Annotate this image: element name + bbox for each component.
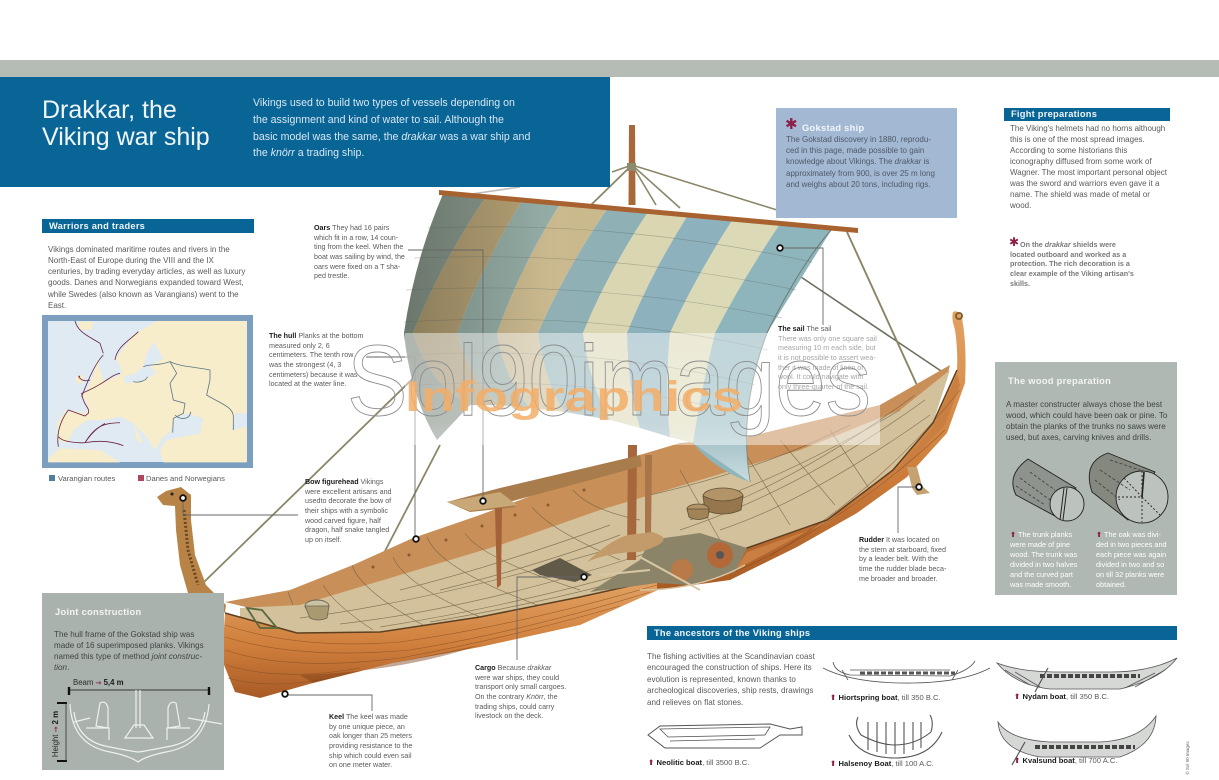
callout: the hull: measured only 2, 6 (269, 342, 330, 350)
callout: rudder: the stern at starboard, fixed (859, 546, 946, 554)
caption: oak trunk: ded in two pieces and (1096, 540, 1167, 549)
boat: Nydam (997, 658, 1177, 692)
callout: oars: Oars They had 16 pairs (314, 224, 389, 232)
label: beam: Beam → 5,4 m (73, 678, 124, 687)
boat: Neolithic (648, 724, 802, 748)
caption: oak trunk: on till 32 planks were (1096, 570, 1164, 579)
heading: warriors and traders: Warriors and traders (49, 221, 145, 231)
callout: keel: by one unique piece, an (329, 723, 405, 731)
text: ancestors: encouraged the construction of ships. Here its (647, 663, 812, 672)
callout: oars: ped trestle. (314, 272, 349, 280)
title: Viking war ship (42, 123, 210, 151)
callout: the hull: centimeters) because it was (269, 371, 358, 379)
text: joint construction: named this type of method joint construc- (54, 652, 202, 661)
callout: bow figurehead: wood carved figure, half (305, 517, 381, 525)
far side wall (225, 365, 950, 620)
log: oak (1089, 453, 1168, 523)
callout: cargo: trading ships, could carry (475, 703, 554, 711)
panel: wood preparation (995, 362, 1177, 595)
text: fight preparations: Wagner. The most important personal object (1010, 168, 1167, 177)
callout: rudder: by a leader belt. With the (859, 555, 938, 563)
callout: the hull: The hull Planks at the bottom (269, 332, 363, 340)
shields text: skills. (1010, 279, 1030, 288)
text: wood preparation (1006, 400, 1167, 442)
boat: Kvalsund (998, 716, 1156, 765)
text: joint construction: tion. (54, 663, 69, 672)
callout: oars: ting from the keel. When the (314, 243, 403, 251)
wall pegs (372, 488, 586, 568)
callout: bow figurehead: dragon, half snake tangled (305, 526, 389, 534)
intro text: the assignment and kind of water to sail. Although the (253, 114, 504, 126)
cargo hold and shields (590, 533, 747, 592)
text: joint construction: The hull frame of the Gokstad ship was (54, 630, 194, 639)
legend: varangian routes: Varangian routes (58, 474, 115, 483)
callout: the sail: measuring 10 m each side, but (778, 344, 876, 352)
callout: oars: which fit in a row, 14 coun- (314, 234, 398, 242)
callout: the hull: centimeters. The tenth row (269, 351, 353, 359)
callout: cargo: transport only small cargoes. (475, 683, 566, 691)
asterisk: ✱ (785, 115, 798, 133)
callout: the hull (269, 332, 363, 388)
caption: Hiortspring: ⬆ Hiortspring boat, till 350 B.C. (830, 693, 941, 702)
callout: bow figurehead: were excellent artisans and (305, 488, 392, 496)
callout: oars: oars were fixed on a T sha- (314, 263, 400, 271)
text: wood preparation: wood, which could have been oak or pine. To (1006, 411, 1167, 420)
caption: oak trunk (1096, 530, 1167, 589)
text: wood preparation: used, but axes, carving knives and drills. (1006, 433, 1151, 442)
callout: rudder (859, 536, 946, 583)
ship hull and deck (157, 125, 966, 698)
callout: oars: boat was sailing by wind, the (314, 253, 405, 261)
callout: the sail: it is not possible to assert wea- (778, 354, 876, 362)
callout: keel: on one meter water. (329, 761, 392, 769)
heading: fight preparations (1004, 108, 1170, 121)
heading: joint construction: Joint construction (55, 607, 142, 617)
title (42, 96, 210, 151)
callout: keel: ship which could even sail (329, 752, 412, 760)
asterisk: ✱ (1009, 235, 1019, 249)
shields text: clear example of the Viking artisan's (1010, 269, 1134, 278)
legend: danes and norwegians: Danes and Norwegians (146, 474, 225, 483)
callout: the sail: only three-quarter of the sail. (778, 383, 869, 391)
callout: the sail: wool. It could navigate with (778, 373, 863, 381)
caption: pine trunk: wood. The trunk was (1010, 550, 1077, 559)
heading: wood preparation: The wood preparation (1008, 376, 1111, 386)
caption: oak trunk: divided in two and so (1096, 560, 1164, 569)
callout: cargo (475, 664, 566, 720)
callout: the hull: located at the water line. (269, 380, 346, 388)
text: fight preparations: name. The shield was made of metal or (1010, 190, 1150, 199)
text: warriors and traders: centuries, by trading everyday articles, as well as luxury (48, 267, 245, 276)
shields text: located outboard and worked as a (1010, 250, 1126, 259)
heading: warriors and traders (42, 219, 254, 233)
callout: rudder: time the rudder blade beca- (859, 565, 946, 573)
boat: Hiortspring (823, 661, 990, 683)
caption: Nydam: ⬆ Nydam boat, till 350 B.C. (1014, 692, 1109, 701)
barrels (703, 488, 743, 504)
label: height: Height → 2 m (51, 711, 60, 757)
text: ancestors (647, 652, 815, 707)
text: fight preparations: was the sword and warriors even gave it a (1010, 179, 1159, 188)
rudder (907, 467, 930, 495)
text: warriors and traders: while Swedes (also known as Varangians) went to the (48, 290, 239, 299)
caption: Halsenoy: ⬆ Halsenoy Boat, till 100 A.C. (830, 759, 934, 768)
stern ring (956, 313, 962, 319)
Gokstad text: The Gokstad discovery in 1880, reprodu- (786, 135, 931, 144)
shields text: On the drakkar shields were (1020, 240, 1116, 249)
text: warriors and traders: East. (48, 301, 66, 310)
text: joint construction (54, 630, 204, 672)
mast lower and trestle (627, 445, 637, 560)
watermark: Infographics (405, 373, 743, 421)
caption: pine trunk: and the curved part (1010, 570, 1073, 579)
callout: bow figurehead: usedto decorate the bow of (305, 497, 391, 505)
callout: cargo: Cargo Because drakkar (475, 664, 551, 672)
callout lines (183, 248, 916, 711)
heading: ancestors: The ancestors of the Viking ships (654, 628, 810, 638)
caption: pine trunk: were made of pine (1010, 540, 1070, 549)
text: wood preparation: obtain the planks of the trunks no saws were (1006, 422, 1166, 431)
caption: Neolithic: ⬆ Neolitic boat, till 3500 B.C. (648, 758, 749, 767)
top grey band (0, 60, 1219, 77)
text: warriors and traders: North-East of Europe during the VIII and the IX (48, 256, 214, 265)
callout: keel: providing resistance to the (329, 742, 412, 750)
intro text: basic model was the same, the drakkar was a war ship and (253, 131, 530, 143)
caption: Kvalsund: ⬆ Kvalsund boat, till 700 A.C. (1014, 756, 1117, 765)
callout: rudder: me broader and broader. (859, 575, 938, 583)
text: wood preparation: A master constructer always chose the best (1006, 400, 1162, 409)
near hull planking (222, 580, 658, 698)
figurehead (157, 487, 226, 640)
mast upper (628, 125, 636, 205)
Gokstad text: ced in this page, made possible to gain (786, 146, 924, 155)
heading: ancestors (647, 626, 1177, 640)
callout: keel: Keel The keel was made (329, 713, 408, 721)
caption: pine trunk (1010, 530, 1077, 589)
text: fight preparations: According to some historians this (1010, 146, 1127, 155)
Gokstad text: knowledge about Vikings. The drakkar is (786, 157, 929, 166)
panel: joint construction (42, 593, 224, 770)
boat: Halsenoy (849, 715, 942, 758)
copyright: © Sol 90 Images (1185, 741, 1190, 775)
text: warriors and traders: Vikings dominated maritime routes and rivers in the (48, 244, 230, 254)
panel: Gokstad ship (776, 108, 957, 218)
text: warriors and traders: goods. Danes and Norwegians expanded toward West, (48, 278, 244, 287)
text: fight preparations: wood. (1010, 201, 1031, 210)
shields text: protection. The rich decoration is a (1010, 259, 1130, 268)
callout: the sail: ther it was made of linen or (778, 364, 864, 372)
caption: oak trunk: obtained. (1096, 580, 1126, 589)
callout dots (180, 245, 922, 697)
sail (404, 194, 832, 482)
callout: bow figurehead: their ships with a symbolic (305, 507, 388, 515)
deck planks (240, 370, 950, 633)
callout: oars (314, 224, 405, 280)
intro text: Vikings used to build two types of vessels depending on (253, 97, 515, 109)
text: fight preparations: iconography diffused from some work of (1010, 157, 1152, 166)
rigging stays (203, 165, 947, 583)
text: joint construction: made of 16 superimposed planks. Vikings (54, 641, 204, 650)
callout: keel: oak longer than 25 meters (329, 732, 412, 740)
callout: bow figurehead (305, 478, 392, 544)
caption: pine trunk: divided in two halves (1010, 560, 1077, 569)
text: ancestors: evolution is represented, known thanks to (647, 675, 796, 684)
callout: bow figurehead: Bow figurehead Vikings (305, 478, 383, 486)
caption: oak trunk: ⬆ The oak was divi- (1096, 530, 1161, 539)
Gokstad text (786, 135, 935, 189)
callout: cargo: were war ships, they could (475, 674, 559, 682)
caption: pine trunk: was made smooth. (1010, 580, 1071, 589)
callout: keel (329, 713, 412, 769)
text: fight preparations: this is one of the most spread images. (1010, 135, 1145, 144)
callout: cargo: livestock on the deck. (475, 712, 543, 720)
Gokstad text: approximately from 900, is over 25 m long (786, 169, 935, 178)
text: ancestors: The fishing activities at the Scandinavian coast (647, 652, 815, 661)
callout: bow figurehead: up on itself. (305, 536, 342, 544)
caption: oak trunk: each piece was again (1096, 550, 1166, 559)
Gokstad heading: Gokstad ship (802, 123, 864, 133)
heading: fight preparations: Fight preparations (1011, 109, 1097, 119)
header panel (0, 77, 610, 187)
callout: the sail (778, 325, 877, 391)
text: fight preparations (1010, 124, 1167, 210)
callout: the sail: The sail The sail (778, 325, 831, 333)
log: pine (1013, 459, 1084, 521)
callout: rudder: Rudder It was located on (859, 536, 940, 544)
text: warriors and traders (48, 244, 246, 310)
callout: the sail: There was only one square sail (778, 335, 877, 343)
text: ancestors: archeological discoveries, ship rests, drawings (647, 686, 813, 695)
Gokstad text: and weighs about 20 tons, including rigs. (786, 180, 931, 189)
shields text (1010, 240, 1134, 288)
text: fight preparations: The Viking's helmets had no horns although (1010, 124, 1165, 133)
note: shields (1009, 235, 1134, 288)
intro text (253, 97, 530, 159)
text: ancestors: and relieves on flat stones. (647, 698, 743, 707)
title: Drakkar, the (42, 96, 177, 124)
yard (439, 190, 858, 233)
intro text: the knörr a trading ship. (253, 147, 364, 159)
caption: pine trunk: ⬆ The trunk planks (1010, 530, 1072, 539)
callout: the hull: was the strongest (4, 3 (269, 361, 341, 369)
watermark: Sol90images (347, 325, 871, 437)
callout: cargo: On the contrary Knörr, the (475, 693, 558, 701)
